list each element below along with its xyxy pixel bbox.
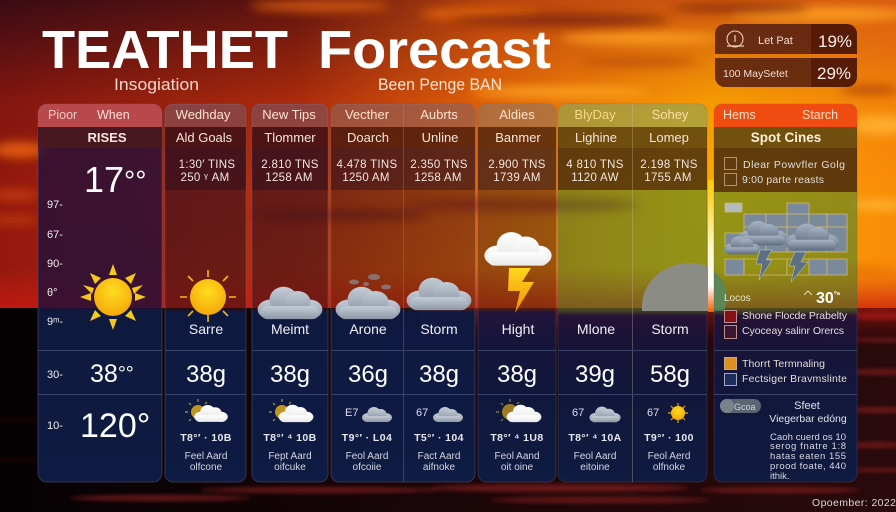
condition labels <box>349 321 458 337</box>
notes: Fact Aard <box>418 451 460 462</box>
notes: Feol Aard <box>346 451 388 462</box>
sidebar note text: prood foate, 440 <box>770 461 846 472</box>
toggle pill: Gcoa <box>734 402 756 412</box>
legend: terminal: Fectsiger Bravmslinte <box>742 373 847 385</box>
icon: sun and cloud <box>496 399 541 422</box>
forecast details: T9°′ · 100 <box>644 432 694 444</box>
values <box>575 361 690 388</box>
icon: cloud <box>258 287 322 319</box>
times: column five: 1258 AM <box>414 172 462 184</box>
icon: sun and cloud <box>269 399 313 422</box>
axis labels: 30- <box>47 369 63 381</box>
note: Feol Aand <box>494 451 540 462</box>
sidebar note text <box>770 432 846 482</box>
stat: row two: 100 MaySetet <box>723 68 788 80</box>
times: column seven: 4 810 TNS <box>566 159 624 171</box>
condition labels: Storm <box>420 321 458 337</box>
panel: day columns four and five <box>331 104 475 482</box>
times: column five: 2.350 TNS <box>410 159 468 171</box>
axis labels: 9ᵐ- <box>47 316 63 328</box>
icon: sun <box>80 264 146 330</box>
checklist <box>724 158 845 186</box>
times: 2.900 TNS <box>488 159 546 171</box>
sidebar header labels: Starch <box>802 108 838 122</box>
times: column four: 4.478 TINS <box>337 159 398 171</box>
temperature readout: °ᵃ <box>834 290 840 299</box>
column header: Aldies <box>499 107 535 122</box>
temperature readout: 30 <box>816 290 834 307</box>
note: oit oine <box>501 462 534 473</box>
value: 38g <box>186 361 226 388</box>
header labels: When <box>97 108 130 122</box>
times: 2.810 TNS <box>261 159 319 171</box>
sidebar note heading <box>769 400 847 425</box>
axis labels: 90- <box>47 258 63 270</box>
values: 36g <box>348 361 388 388</box>
icon: sun <box>180 270 236 322</box>
times: 1:30′ TINS <box>179 159 235 171</box>
subheading: RISES <box>87 130 127 145</box>
axis labels: 10- <box>47 420 63 432</box>
notes: aifnoke <box>423 462 456 473</box>
panel: sidebar <box>714 104 857 482</box>
map: storm tile grid <box>724 203 847 282</box>
column headers: BlyDay <box>574 107 616 122</box>
times: column seven: 1120 AW <box>571 172 619 184</box>
times: column four <box>337 159 398 184</box>
legend: probability: Shone Flocde Prabelty <box>742 310 848 322</box>
forecast details: T8°′ ⁴ 10A <box>568 432 622 444</box>
subtitle left: Insogiation <box>114 76 199 94</box>
stats panel <box>715 24 857 87</box>
icon: sun and cloud <box>185 399 228 422</box>
icon: small sun <box>647 403 688 423</box>
checklist: 9:00 parte reasts <box>742 174 824 186</box>
subheading: Ald Goals <box>176 130 233 145</box>
note: Fept Aard <box>268 451 312 462</box>
forecast detail: T8°′ ⁴ 1U8 <box>490 432 544 444</box>
temperature: high: °° <box>124 165 146 196</box>
sidebar header labels <box>723 108 838 122</box>
value: 38g <box>270 361 310 388</box>
subheadings: Doarch <box>347 130 389 145</box>
legend: terminal: Thorrt Termnaling <box>742 358 825 370</box>
subheading: Tlommer <box>264 130 316 145</box>
note: oifcuke <box>274 462 306 473</box>
notes <box>346 451 460 473</box>
condition labels: Arone <box>349 321 387 337</box>
sidebar note text: ithik. <box>770 471 790 482</box>
stat: row two: 29% <box>817 64 851 83</box>
notes <box>574 451 690 473</box>
values: 58g <box>650 361 690 388</box>
subheadings <box>347 130 458 145</box>
condition labels <box>577 321 689 337</box>
axis labels: 97- <box>47 199 63 211</box>
condition label: Hight <box>502 321 534 337</box>
times: column seven <box>566 159 624 184</box>
notes: olfnoke <box>653 462 686 473</box>
title <box>42 20 551 80</box>
icon: small cloud <box>572 407 621 422</box>
column headers: Sohey <box>652 107 689 122</box>
note <box>185 451 227 473</box>
temperature: mid: 38 <box>90 360 118 388</box>
header labels: Pioor <box>48 108 77 122</box>
times: column five <box>410 159 468 184</box>
condition label: Sarre <box>189 321 223 337</box>
notes: Feol Aard <box>574 451 616 462</box>
notes: Feol Aerd <box>648 451 690 462</box>
times: column eight: 2.198 TNS <box>640 159 698 171</box>
times: column eight: 1755 AM <box>644 172 692 184</box>
values <box>348 361 459 388</box>
condition labels: Mlone <box>577 321 615 337</box>
subheadings: Lomep <box>649 130 689 145</box>
sidebar note heading: Sfeet <box>794 400 820 412</box>
column headers: Aubrts <box>420 107 458 122</box>
times <box>488 159 546 184</box>
column headers <box>574 107 689 122</box>
panel: day column two <box>165 104 246 482</box>
condition label: Meimt <box>271 321 309 337</box>
forecast details <box>568 432 694 444</box>
icon: small sun: 67 <box>647 407 659 419</box>
times: column four: 1250 AM <box>342 172 390 184</box>
times <box>261 159 319 184</box>
temperature readout <box>804 290 840 307</box>
times: column eight <box>640 159 698 184</box>
note: olfcone <box>190 462 223 473</box>
times: 250 ᵞ AM <box>181 172 229 184</box>
header labels <box>48 108 130 122</box>
column headers <box>345 107 458 122</box>
values: 38g <box>419 361 459 388</box>
note <box>494 451 540 473</box>
title: Forecast <box>318 20 551 80</box>
axis labels: 67- <box>47 229 63 241</box>
stat: row one: 19% <box>818 32 852 51</box>
column headers: Vecther <box>345 107 390 122</box>
times: 1258 AM <box>265 172 313 184</box>
legend: probability <box>724 310 848 338</box>
legend: probability: Cyoceay salinr Orercs <box>742 325 844 337</box>
stat: row one: Let Pat <box>758 35 793 47</box>
sidebar note text: hatas eaten 155 <box>770 451 846 462</box>
icon: small cloud: 67 <box>416 407 428 419</box>
toggle pill <box>720 399 761 413</box>
sidebar note text: Caoh cuerd os 10 <box>770 432 846 443</box>
sidebar note text: serog fnatre 1:8 <box>770 441 846 452</box>
note: Feel Aard <box>185 451 227 462</box>
stat: row two <box>715 58 857 87</box>
column header: New Tips <box>262 107 316 122</box>
icon: cloud <box>407 278 471 310</box>
column header: Wedhday <box>176 107 231 122</box>
subheadings: Lighine <box>575 130 617 145</box>
notes: ofcoiie <box>353 462 382 473</box>
legend: terminal <box>724 358 847 386</box>
times: 1739 AM <box>493 172 541 184</box>
sidebar header labels: Hems <box>723 108 756 122</box>
sidebar heading: Spot Cines <box>751 130 821 145</box>
icon: small cloud <box>416 407 463 422</box>
note <box>268 451 312 473</box>
axis labels <box>47 199 63 432</box>
subheadings <box>575 130 689 145</box>
forecast detail: T8°′ · 10B <box>180 432 232 444</box>
subheadings: Unline <box>422 130 458 145</box>
icon: small cloud: 67 <box>572 407 584 419</box>
panel: day column three <box>252 104 328 482</box>
temperature: mid: °° <box>118 363 134 385</box>
footer date: Opoember: 2022 <box>812 497 896 509</box>
value: 38g <box>497 361 537 388</box>
icon: thunderstorm <box>484 232 552 313</box>
forecast details <box>342 432 464 444</box>
temperature: high: 17 <box>84 159 124 200</box>
title: TEATHET <box>42 20 288 80</box>
panel: day column six <box>478 104 556 482</box>
stat: row one <box>715 24 857 54</box>
panel: day columns seven and eight <box>558 104 707 482</box>
sidebar note heading: Viegerbar edóng <box>769 413 847 425</box>
legend label: Locos <box>724 293 751 304</box>
forecast detail: T8°′ ⁴ 10B <box>263 432 317 444</box>
condition labels: Storm <box>651 321 689 337</box>
icon: small cloud <box>345 407 392 422</box>
checklist: Dlear Powvfler Golg <box>743 159 845 171</box>
forecast details: T9°′ · L04 <box>342 432 392 444</box>
forecast details: T5°′ · 104 <box>414 432 464 444</box>
subtitle right: Been Penge BAN <box>378 76 502 94</box>
subheading: Banmer <box>495 130 541 145</box>
axis labels: θ° <box>47 287 58 299</box>
temperature: low: 120° <box>80 407 150 445</box>
panel: current conditions <box>38 104 162 482</box>
values: 39g <box>575 361 615 388</box>
icon: cloud with mist <box>336 274 400 319</box>
icon: small cloud: E7 <box>345 407 358 419</box>
horizon sun <box>642 180 727 312</box>
notes: eitoine <box>580 462 610 473</box>
times <box>179 159 235 184</box>
